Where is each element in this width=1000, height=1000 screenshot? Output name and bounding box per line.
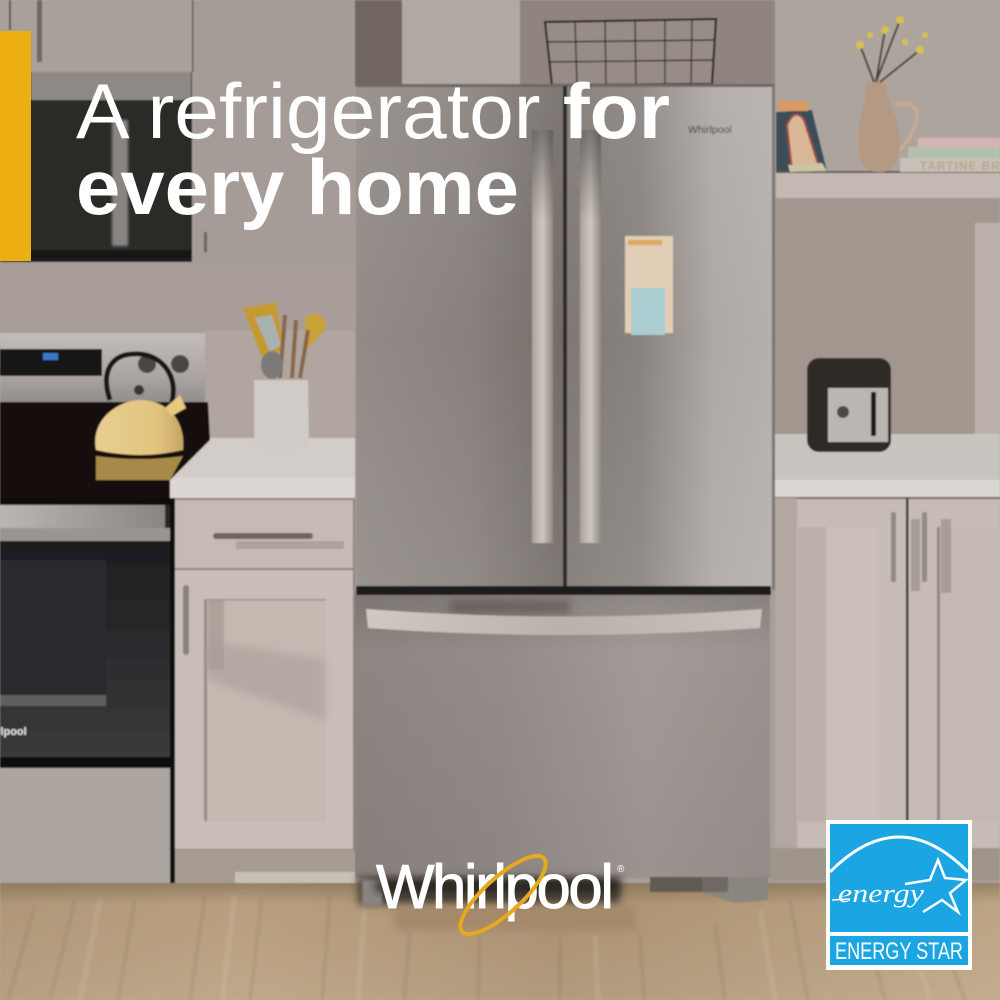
title: A refrigerator for (76, 67, 670, 155)
title: every home (76, 143, 519, 231)
Whirlpool logo: Whirlpool (376, 853, 614, 922)
utensil holder (243, 302, 326, 450)
door handles (532, 130, 601, 543)
Energy Star badge: energy (838, 879, 925, 908)
yellow accent bar (0, 31, 31, 261)
vase with branches (856, 16, 928, 172)
title (76, 67, 670, 231)
wire basket (545, 19, 716, 85)
upper cabinets (0, 0, 355, 263)
fridge upper doors (356, 86, 564, 590)
stacked books (900, 138, 1000, 173)
Whirlpool logo: ® (617, 864, 625, 875)
fridge base grille and foot (650, 877, 702, 892)
microwave (0, 72, 192, 262)
kettle (95, 354, 186, 480)
energy star (905, 860, 966, 912)
counter left and utensils (170, 302, 355, 498)
fridge gap (356, 586, 771, 595)
lower cabinets left (175, 498, 355, 885)
Energy Star badge: ENERGY STAR (835, 938, 963, 965)
shelf with decor (776, 16, 1000, 198)
lower cabinets right and counter (770, 358, 1000, 880)
refrigerator (355, 84, 775, 903)
floor (0, 883, 1000, 1000)
picture frame (776, 101, 827, 172)
toaster (807, 358, 891, 452)
freezer drawer (355, 595, 770, 878)
Whirlpool logo (376, 845, 625, 945)
magnetic notes (625, 236, 673, 335)
drawer handle (366, 609, 762, 635)
blurred band behind logo (358, 877, 635, 930)
Energy Star badge (826, 820, 972, 970)
fridge badge: Whirlpool (688, 124, 732, 136)
stove (0, 333, 210, 893)
